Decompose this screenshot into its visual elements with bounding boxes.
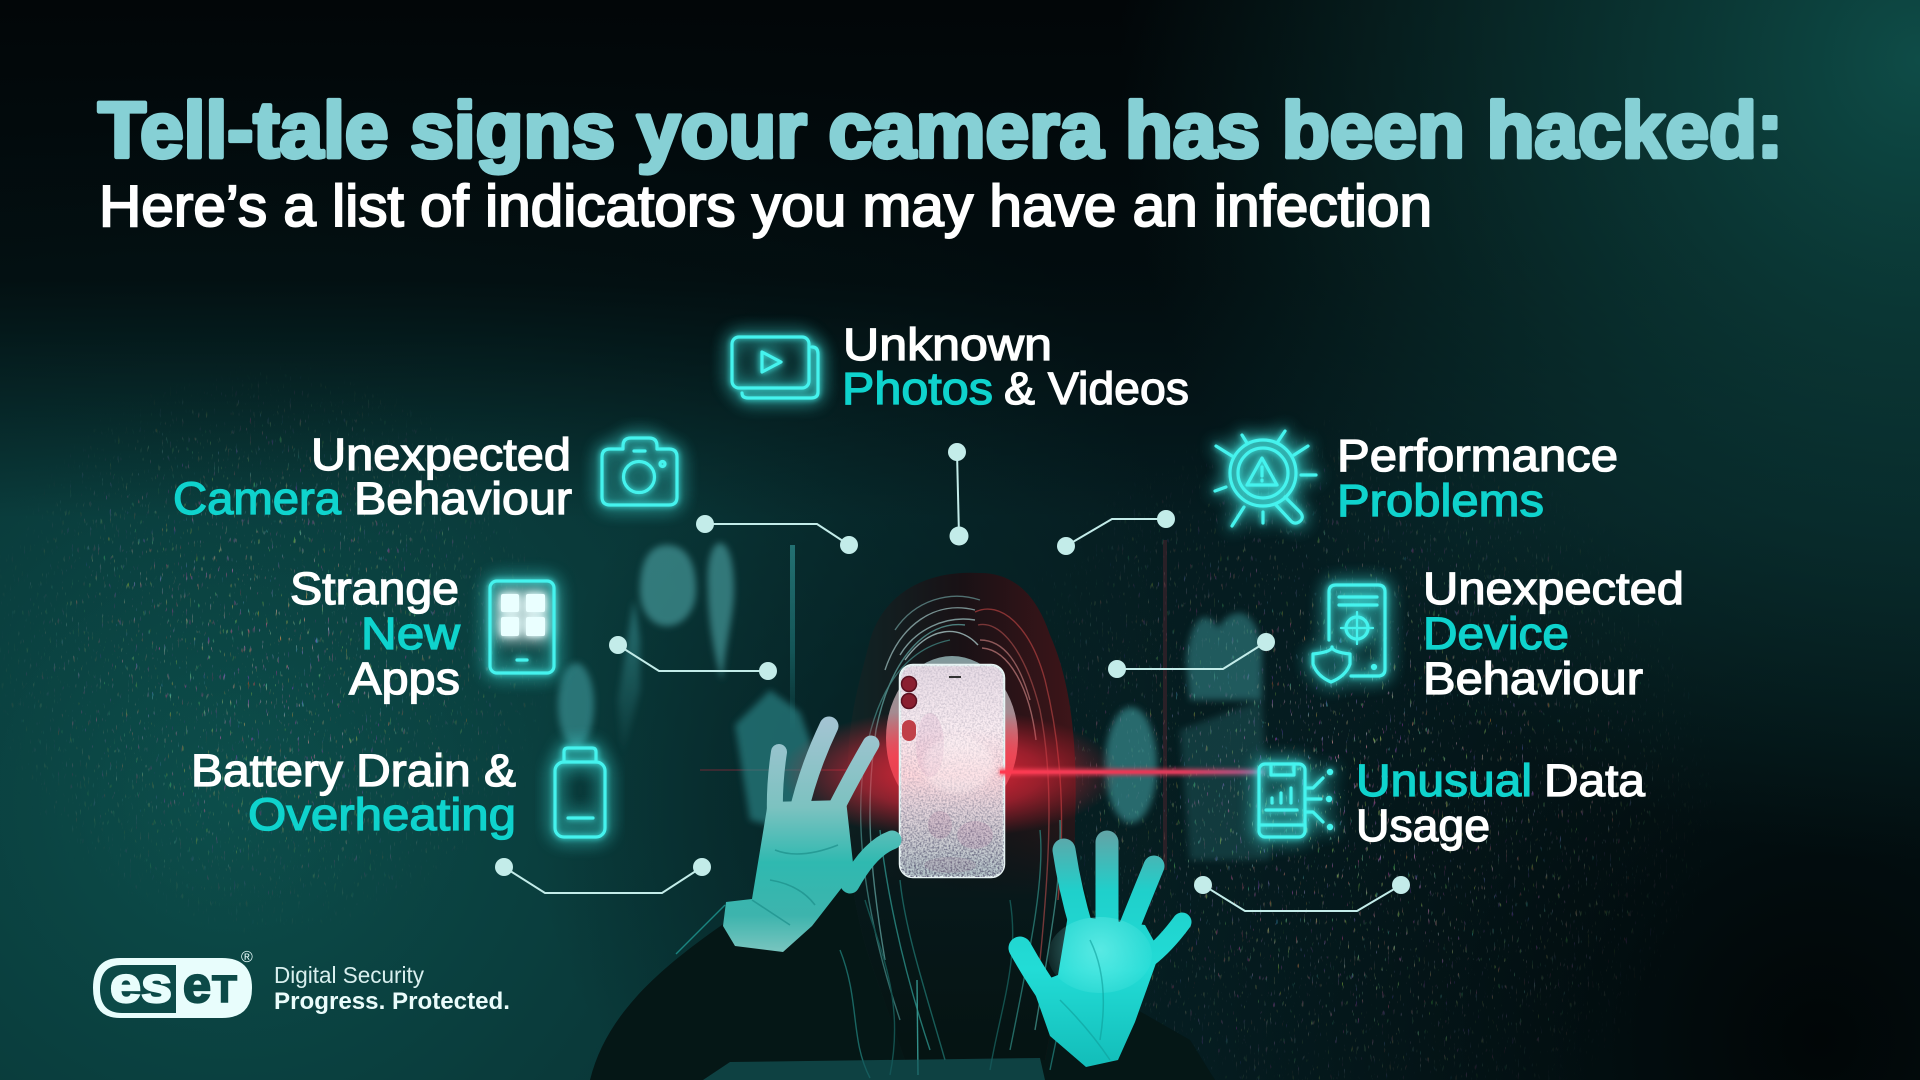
label: Device [1423, 608, 1569, 659]
label: Apps [349, 653, 460, 704]
tagline: Digital Security [274, 962, 424, 988]
label: New [361, 608, 461, 659]
tagline: Progress. Protected. [274, 988, 510, 1015]
connector: performance [1057, 510, 1175, 555]
face [886, 656, 1018, 820]
label: Photos [842, 363, 993, 414]
hair shadow [846, 760, 1075, 1060]
label: Problems [1337, 475, 1544, 526]
label [842, 319, 1189, 414]
red laser line [1000, 769, 1265, 775]
label: Battery Drain & [191, 745, 516, 796]
connectors [495, 443, 1410, 911]
ghost figures [558, 543, 1270, 860]
title: Tell-tale signs your camera has been hacked: [98, 85, 1783, 174]
icon: camera [602, 438, 677, 505]
item: unknown photos and videos [732, 319, 1189, 414]
label [1337, 430, 1618, 526]
label: & Videos [1004, 363, 1189, 414]
label: Performance [1337, 430, 1618, 481]
person [590, 573, 1215, 1080]
hair strands [676, 596, 1080, 1078]
label: Overheating [248, 789, 516, 840]
red glow [760, 680, 1140, 870]
label: Usage [1356, 800, 1490, 851]
connector: battery [495, 858, 711, 893]
label [173, 429, 572, 524]
subtitle: Here’s a list of indicators you may have an infection [99, 174, 1432, 239]
icon: battery [555, 748, 605, 837]
logo: eset: e [183, 957, 211, 1013]
item: battery drain and overheating [191, 745, 605, 840]
tagline [274, 962, 510, 1015]
label [290, 563, 461, 704]
label [1423, 563, 1684, 704]
left hand [723, 726, 892, 952]
label [191, 745, 516, 840]
icon: phone with app grid [490, 581, 554, 673]
item: strange new apps [290, 563, 554, 704]
label: Data [1544, 755, 1646, 806]
sweater and shoulders [590, 860, 1215, 1080]
label: Behaviour [1423, 653, 1643, 704]
connector: apps [609, 636, 777, 680]
item: unexpected camera behaviour [173, 429, 677, 524]
connector: photos [948, 443, 968, 546]
connector: camera [696, 515, 858, 554]
label: Strange [290, 563, 459, 614]
icon: video stack [732, 337, 818, 398]
label: Camera [173, 473, 342, 524]
logo: eset: ® [241, 949, 253, 966]
label: Unexpected [311, 429, 571, 480]
icon: magnifier warning [1215, 431, 1316, 526]
connector: data [1194, 876, 1410, 911]
logo: eset: T [212, 969, 237, 1011]
right hand [1020, 842, 1182, 1067]
icon: phone with data chart [1259, 764, 1332, 837]
smartphone [898, 663, 1006, 879]
table edge [703, 1058, 1045, 1080]
label: Unexpected [1423, 563, 1684, 614]
icon: phone with shield [1313, 585, 1385, 682]
label: Unknown [843, 319, 1052, 370]
label: Behaviour [354, 473, 572, 524]
logo: eset: es [110, 957, 172, 1013]
item: unexpected device behaviour [1313, 563, 1684, 704]
item: performance problems [1215, 430, 1618, 526]
item: unusual data usage [1259, 755, 1646, 851]
hair [846, 573, 1076, 1060]
label [1356, 755, 1646, 851]
label: Unusual [1356, 755, 1532, 806]
connector: device [1108, 633, 1275, 678]
logo: eset [93, 949, 253, 1018]
